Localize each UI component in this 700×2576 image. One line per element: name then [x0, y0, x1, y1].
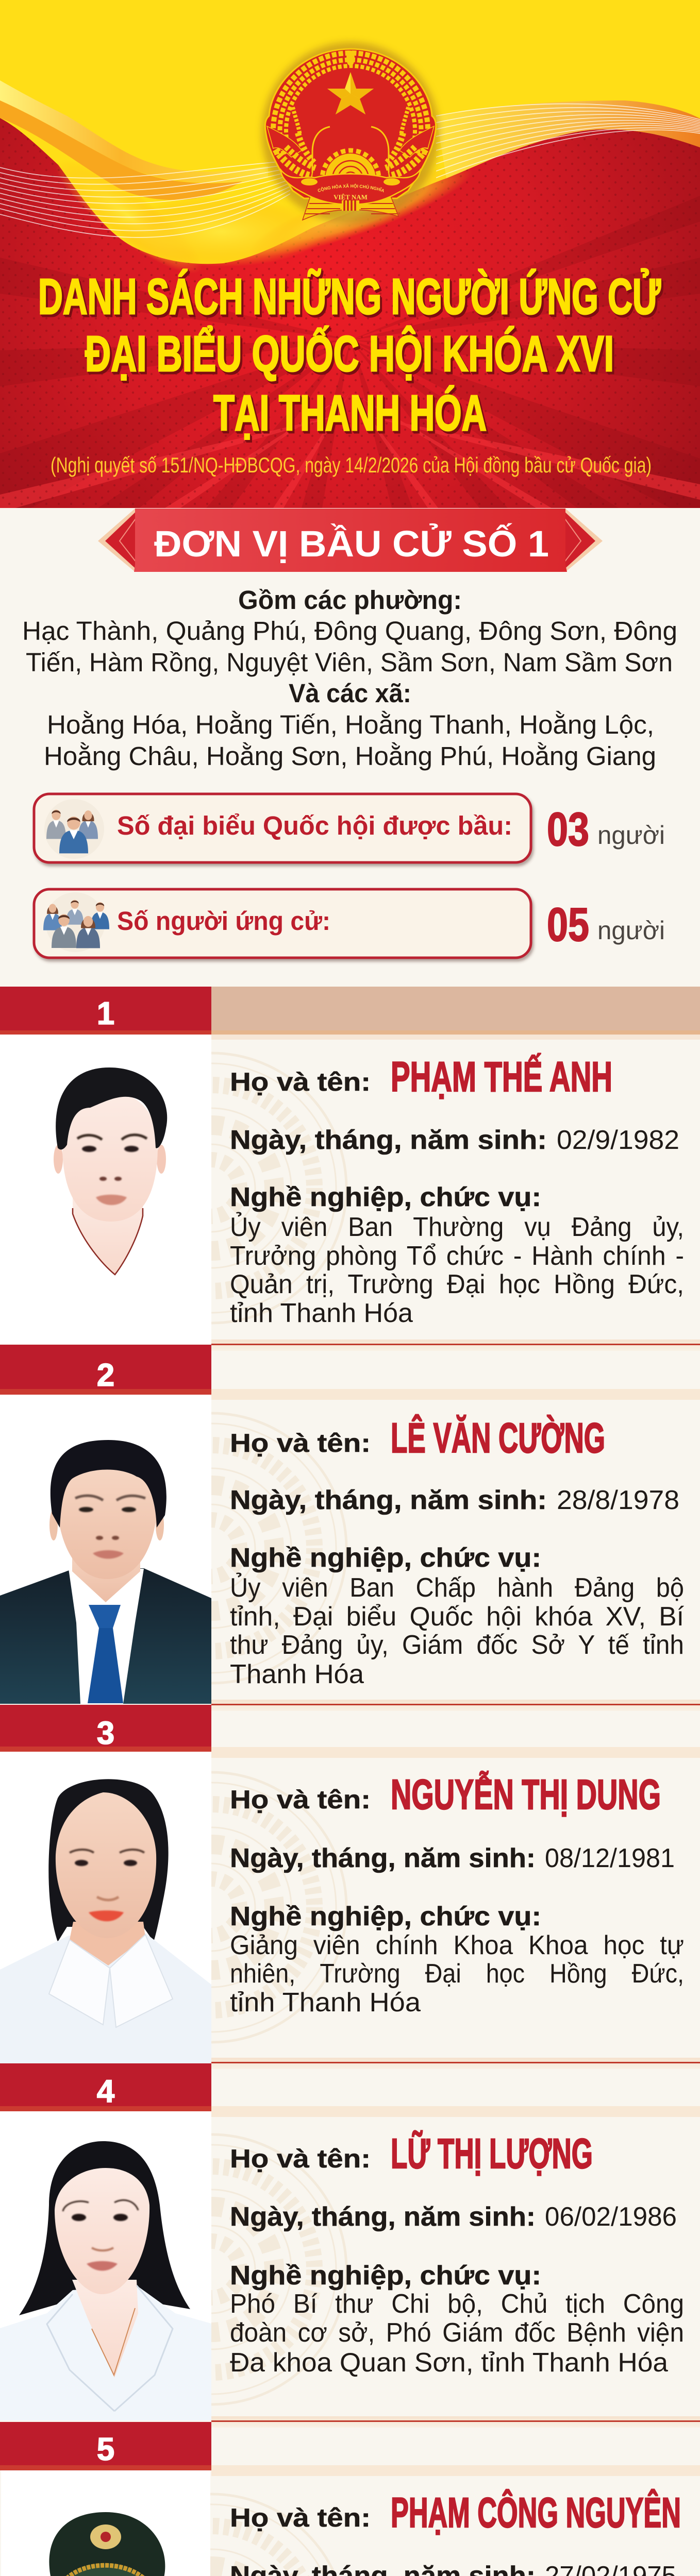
position 2: [230, 1543, 685, 1689]
position 2: tỉnh, Đại biểu Quốc hội khóa XV, Bí: [230, 1602, 685, 1632]
drum motif: [76, 1053, 346, 1323]
name scroll: VIỆT NAM: [334, 193, 368, 201]
birth date 4: Ngày, tháng, năm sinh:: [230, 2202, 536, 2232]
ward and commune list: Hoằng Châu, Hoằng Sơn, Hoằng Phú, Hoằng Giang: [44, 741, 656, 771]
drum motif: [76, 2494, 346, 2576]
position 4: Đa khoa Quan Sơn, tỉnh Thanh Hóa: [230, 2348, 668, 2378]
name scroll: CỘNG HÒA XÃ HỘI CHỦ NGHĨA: [318, 183, 384, 193]
position 3: tỉnh Thanh Hóa: [230, 1988, 421, 2018]
wheat rim: [273, 53, 428, 155]
drum motif: [76, 1772, 346, 2042]
value: 05 people: [547, 899, 665, 951]
left ribbon edge: [0, 100, 242, 200]
position 1: Trưởng phòng Tổ chức - Hành chính -: [230, 1241, 684, 1271]
birth date 1: Ngày, tháng, năm sinh:: [230, 1125, 547, 1155]
emblem halo: [262, 42, 439, 224]
name row 4: [230, 2130, 593, 2177]
name row 5: [230, 2489, 681, 2536]
birth date 2: Ngày, tháng, năm sinh:: [230, 1485, 547, 1515]
title: [38, 268, 661, 441]
value: 03 people: [547, 803, 665, 856]
birth date 2: [230, 1485, 679, 1515]
name row 3: Họ và tên:: [230, 1785, 371, 1814]
portrait 2: [0, 1395, 211, 1704]
icon: three delegates: [44, 799, 104, 859]
name row 1: [230, 1054, 612, 1100]
ward and commune list: [22, 585, 677, 771]
position 1: tỉnh Thanh Hóa: [230, 1298, 413, 1328]
value: 03 people: người: [597, 821, 665, 850]
candidate 5: [0, 2416, 700, 2576]
wheat sheaf left: [267, 107, 330, 176]
number bar 5: 5: [97, 2432, 114, 2467]
birth date 2: 28/8/1978: [557, 1485, 679, 1515]
sunburst rays: [0, 196, 700, 508]
position 1: Quản trị, Trường Đại học Hồng Đức,: [230, 1269, 684, 1299]
number bar 3: [0, 1700, 700, 1758]
ward and commune list: Gồm các phường:: [238, 585, 462, 615]
position 3: Giảng viên chính Khoa Khoa học tự: [230, 1930, 684, 1960]
number bar 1: [0, 987, 700, 1040]
number bar 2: 2: [97, 1358, 114, 1393]
yellow glow swoosh: [58, 166, 469, 272]
ward and commune list: Hoằng Hóa, Hoằng Tiến, Hoằng Thanh, Hoằng Lộc,: [47, 710, 654, 739]
position 1: Ủy viên Ban Thường vụ Đảng ủy,: [230, 1212, 684, 1242]
name row 4: LỮ THỊ LƯỢNG: [391, 2130, 593, 2177]
banner: electoral unit: [98, 509, 603, 572]
number bar 1: 1: [97, 996, 114, 1031]
candidate 1: [0, 987, 700, 1344]
name row 2: [230, 1414, 605, 1462]
position 2: Thanh Hóa: [230, 1659, 364, 1689]
position 4: Nghề nghiệp, chức vụ:: [230, 2261, 541, 2291]
position 4: đoàn cơ sở, Phó Giám đốc Bệnh viện: [230, 2318, 684, 2348]
right white line wave: [436, 104, 700, 178]
yellow background: [0, 0, 700, 264]
birth date 3: [230, 1843, 675, 1873]
name row 3: [230, 1771, 661, 1818]
name scroll: [280, 168, 421, 211]
number bar 5: [0, 2416, 700, 2476]
stat: deputies to be elected: Số đại biểu Quốc hội được bầu:: [117, 811, 512, 840]
cogwheel: [322, 150, 379, 207]
right gold ribbon: [436, 100, 700, 178]
number bar 3: 3: [97, 1716, 114, 1751]
icon: five candidates: [43, 892, 109, 952]
birth date 1: [230, 1125, 679, 1155]
number bar 4: [0, 2058, 700, 2117]
wheat sheaf right: [371, 107, 434, 176]
halftone dots: [0, 118, 700, 508]
ward and commune list: Hạc Thành, Quảng Phú, Đông Quang, Đông Sơn, Đông: [22, 616, 677, 646]
birth date 4: [230, 2202, 677, 2232]
left gold ribbon: [0, 80, 268, 183]
stat: deputies to be elected: [34, 794, 531, 862]
position 1: [230, 1182, 684, 1328]
position 4: Phó Bí thư Chi bộ, Chủ tịch Công: [230, 2289, 684, 2319]
ward and commune list: Tiến, Hàm Rồng, Nguyệt Viên, Sầm Sơn, Nam Sầm Sơn: [26, 648, 673, 677]
left white line wave: [0, 161, 290, 238]
name row 4: Họ và tên:: [230, 2144, 371, 2173]
header panel: [0, 0, 700, 508]
bright bottom rays: [0, 392, 700, 508]
value: 03 people: 03: [547, 803, 589, 856]
title: TẠI THANH HÓA: [213, 385, 487, 441]
position 4: [230, 2261, 684, 2378]
stat: candidates: [34, 889, 531, 958]
name row 2: Họ và tên:: [230, 1429, 371, 1458]
value: 05 people: người: [597, 916, 665, 945]
number bar 2: [0, 1340, 700, 1400]
birth date 5: [230, 2561, 676, 2576]
position 2: thư Đảng ủy, Giám đốc Sở Y tế tỉnh: [230, 1630, 684, 1660]
portrait 3: [0, 1752, 211, 2063]
portrait 1: [0, 1035, 211, 1344]
birth date 3: 08/12/1981: [545, 1843, 675, 1873]
stat: candidates: Số người ứng cử:: [117, 906, 330, 936]
number bar 4: 4: [97, 2074, 115, 2109]
ribbon base: [303, 195, 398, 220]
position 2: Nghề nghiệp, chức vụ:: [230, 1543, 541, 1573]
drum motif: [76, 2134, 346, 2404]
position 3: [230, 1902, 684, 2018]
birth date 4: 06/02/1986: [545, 2202, 677, 2232]
drum motif: [76, 1413, 346, 1683]
top ornament: [346, 50, 355, 66]
candidate 3: [0, 1700, 700, 2063]
gold star: [327, 72, 374, 114]
portrait 5: [1, 2470, 210, 2576]
national emblem: [259, 39, 444, 227]
position 1: Nghề nghiệp, chức vụ:: [230, 1182, 541, 1212]
position 3: Nghề nghiệp, chức vụ:: [230, 1902, 541, 1931]
value: 05 people: 05: [547, 899, 589, 951]
name row 5: Họ và tên:: [230, 2503, 371, 2532]
birth date 1: 02/9/1982: [557, 1125, 679, 1155]
banner: electoral unit: ĐƠN VỊ BẦU CỬ SỐ 1: [154, 523, 549, 565]
candidate 4: [0, 2058, 700, 2420]
birth date 3: Ngày, tháng, năm sinh:: [230, 1843, 536, 1873]
portrait 4: [0, 2111, 211, 2420]
ward and commune list: Và các xã:: [289, 679, 411, 708]
candidate 2: [0, 1340, 700, 1704]
red wave field: [0, 118, 700, 508]
emblem disc: [265, 49, 436, 198]
name row 1: Họ và tên:: [230, 1067, 371, 1096]
